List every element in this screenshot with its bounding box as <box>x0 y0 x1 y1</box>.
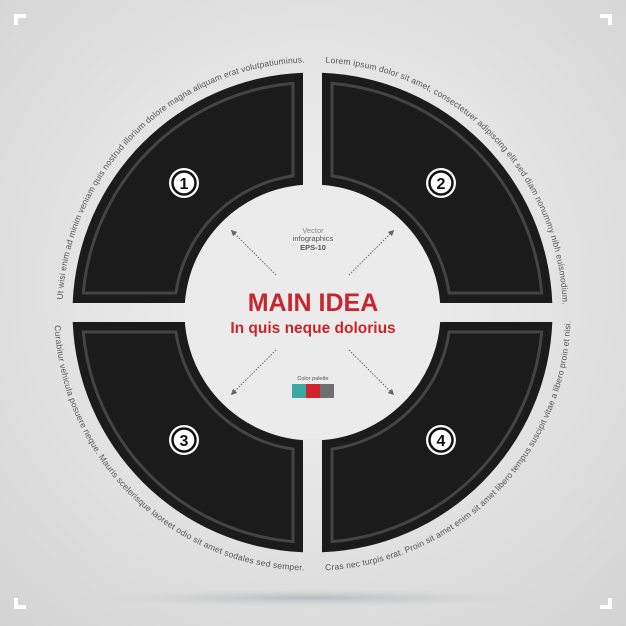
vector label: EPS-10 <box>300 243 326 252</box>
vector label: Vector <box>302 226 324 235</box>
quadrant 4 <box>322 322 552 552</box>
badge 1: 1 <box>180 176 189 193</box>
ring quadrants <box>73 73 552 552</box>
vector label <box>293 226 333 252</box>
vector label: infographics <box>293 234 333 243</box>
floor shadow <box>92 589 532 607</box>
subtitle: In quis neque dolorius <box>230 320 396 337</box>
badge 4 <box>426 425 456 455</box>
main idea title: MAIN IDEA <box>248 289 378 317</box>
badge 3 <box>169 425 199 455</box>
badge 3: 3 <box>180 433 189 450</box>
badge 1 <box>169 168 199 198</box>
curved text 3: Curabitur vehicula posuere neque. Mauris scelerisque laoreet odio sit amet sodales sed semper. <box>54 326 304 572</box>
badge 4: 4 <box>437 433 446 450</box>
arrows <box>233 232 392 393</box>
color palette <box>292 376 334 398</box>
curved text 2: Lorem ipsum dolor sit amet, consectetuer adipiscing elit sed diam nonummy nibh euismodium. <box>326 56 568 304</box>
curved text 4: Cras nec turpis erat. Proin sit amet enim sit amet libero tempus suscipit vitae a libero proin et nisi. <box>326 322 570 570</box>
color palette: Color palette <box>297 376 329 382</box>
quadrant 1 <box>73 73 303 303</box>
badge 2 <box>426 168 456 198</box>
badge 2: 2 <box>437 176 446 193</box>
curved text 1: Ut wisi enim ad minim veniam quis nostrud illorium dolore magna aliquam erat volutpatiuminus. <box>56 58 304 299</box>
quadrant 2 <box>322 73 552 303</box>
quadrant 3 <box>73 322 303 552</box>
center disc <box>186 186 440 440</box>
